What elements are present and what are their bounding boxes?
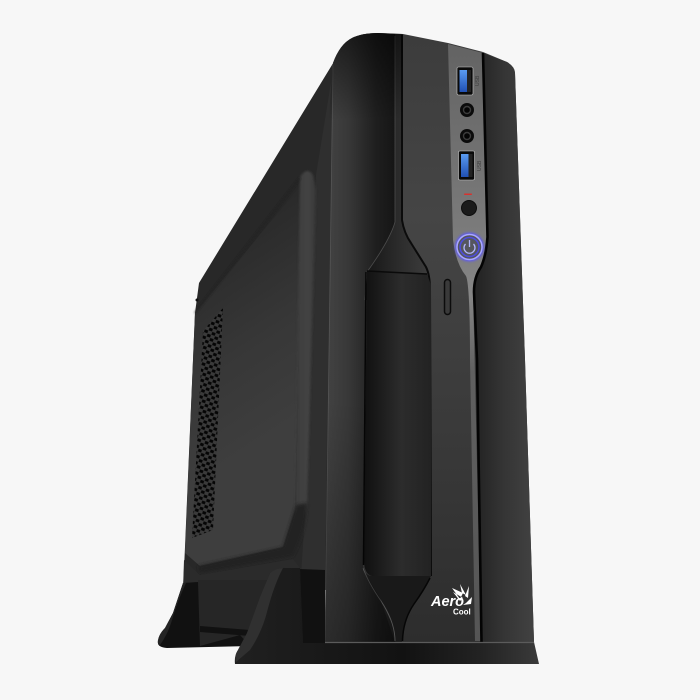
small screw — [196, 298, 198, 302]
left rounded corner section — [325, 33, 396, 642]
reset button — [462, 200, 476, 216]
rear opening between feet — [198, 580, 303, 646]
black groove line — [474, 53, 488, 642]
port: USB 3.0 bottom: USB — [477, 160, 483, 171]
power button with blue ring — [457, 234, 482, 260]
door left edge — [364, 272, 366, 565]
groove above door — [402, 35, 431, 576]
side panel — [183, 60, 335, 590]
logo: AeroCool: Cool — [453, 608, 471, 616]
lower shading — [325, 400, 395, 642]
port: USB 3.0 bottom — [458, 151, 483, 180]
ventilation mesh — [192, 308, 223, 538]
base top edge — [325, 642, 534, 644]
logo: AeroCool — [430, 584, 472, 616]
recessed panel surface — [185, 184, 302, 566]
right section of front panel — [473, 53, 534, 642]
front foot highlight — [235, 568, 283, 662]
base with front foot — [235, 568, 539, 664]
front face — [325, 33, 534, 642]
rear foot — [158, 582, 250, 648]
eject slot — [444, 280, 450, 314]
corner line — [325, 65, 333, 642]
top edge of recess line — [195, 178, 300, 313]
left highlight of neck — [365, 36, 395, 300]
vertical channel and neck — [365, 34, 431, 300]
port: USB 3.0 top: USB — [475, 75, 481, 86]
port: headphone jack — [460, 103, 474, 117]
port: microphone jack — [460, 129, 474, 143]
port: USB 3.0 top — [457, 67, 481, 95]
port strip — [448, 44, 487, 641]
lower bevel shadow — [198, 503, 307, 573]
HDD LED indicator — [464, 194, 472, 195]
panel band right of recess — [300, 70, 333, 590]
logo: AeroCool: Aero — [430, 594, 464, 610]
top shading — [328, 33, 403, 130]
door top edge — [367, 271, 427, 274]
drive bay door — [364, 271, 431, 576]
lower side body — [183, 559, 325, 590]
vertical bevel band — [295, 171, 316, 516]
Y shaped tray under door — [363, 566, 431, 642]
